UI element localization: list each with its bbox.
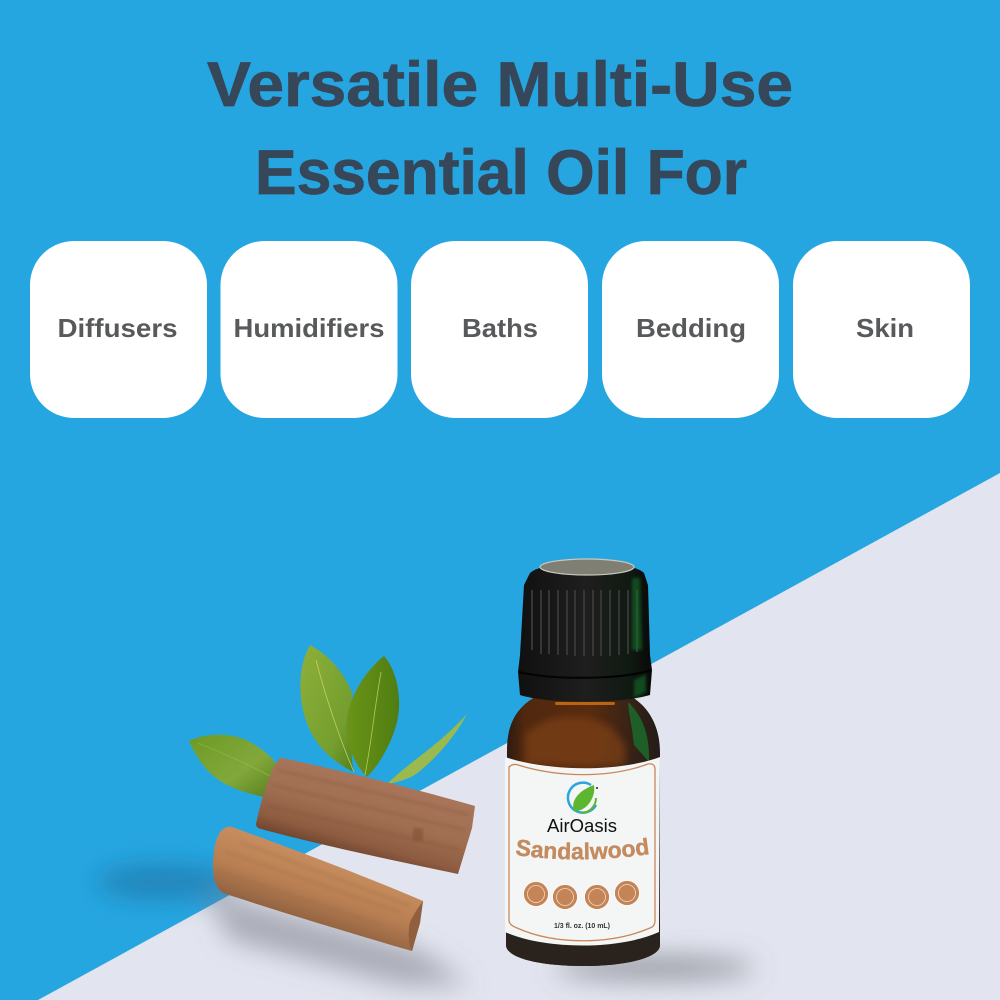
card: Humidifiers: Humidifiers xyxy=(234,313,384,343)
sandalwood leaves xyxy=(189,645,467,797)
size text: 1/3 fl. oz. (10 mL) xyxy=(554,923,610,930)
title xyxy=(207,50,793,208)
grey diagonal panel xyxy=(38,473,1000,1000)
card: Diffusers xyxy=(30,241,207,418)
card: Skin: Skin xyxy=(856,313,914,343)
bottle cap xyxy=(518,559,652,705)
brand name: AirOasis xyxy=(547,816,617,836)
leaf: tall middle xyxy=(300,645,354,772)
essential oil bottle xyxy=(505,558,660,966)
leaf: thin right xyxy=(387,714,467,784)
card: Skin xyxy=(793,241,970,418)
cap silver disc xyxy=(540,559,634,575)
soft shadows xyxy=(95,865,755,985)
AirOasis logo icon xyxy=(568,783,598,813)
card: Baths xyxy=(411,241,588,418)
bottle glass xyxy=(506,697,660,966)
wood stick: lower xyxy=(213,827,423,951)
leaf: right of middle xyxy=(347,656,399,777)
certification badges xyxy=(524,880,640,910)
card: Humidifiers xyxy=(220,241,398,418)
bottle label xyxy=(505,757,660,946)
product name: Sandalwood xyxy=(516,838,649,860)
card: Baths: Baths xyxy=(462,313,538,343)
leaf: left xyxy=(189,735,276,797)
title: Versatile Multi-Use xyxy=(207,50,793,120)
card: Bedding xyxy=(602,241,779,418)
card: Bedding: Bedding xyxy=(636,313,746,343)
use cards row xyxy=(30,241,970,418)
title: Essential Oil For xyxy=(255,138,747,208)
card: Diffusers: Diffusers xyxy=(58,313,178,343)
wood stick: upper xyxy=(256,758,475,874)
